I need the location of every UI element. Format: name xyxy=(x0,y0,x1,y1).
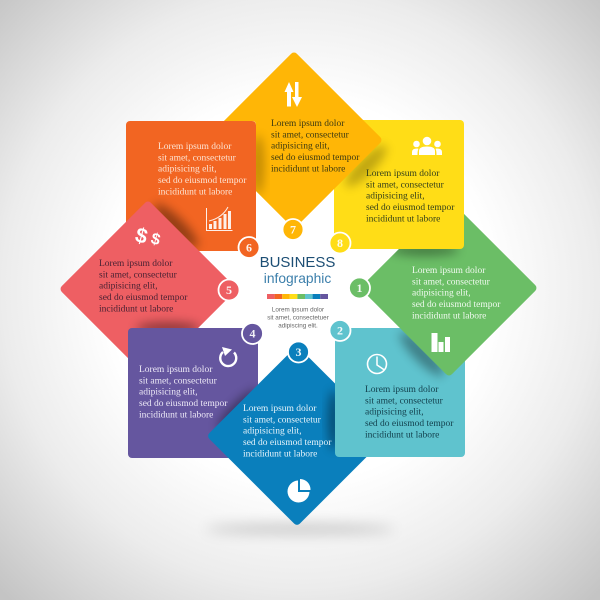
badge 6: 6 xyxy=(246,240,252,254)
title: BUSINESS xyxy=(260,254,335,271)
icon: refresh arrow xyxy=(220,347,236,366)
panel 6: orange square: Lorem ipsum dolor xyxy=(158,142,232,152)
panel 5: red diamond: sed do eiusmod tempor xyxy=(99,293,188,303)
panel 3: blue diamond xyxy=(208,355,366,525)
panel 4: purple square: Lorem ipsum dolor xyxy=(139,365,213,375)
panel 5: red diamond xyxy=(60,202,227,358)
badge 4 xyxy=(242,323,263,344)
badge 5: 5 xyxy=(226,283,232,297)
badge 8 xyxy=(330,232,350,254)
panel 1: green diamond: adipisicing elit, xyxy=(412,289,471,299)
icon: dollar signs: $ xyxy=(133,224,150,249)
badge 5 xyxy=(218,280,240,300)
panel 2: teal square: incididunt ut labore xyxy=(365,430,439,440)
panel 6: orange square: sit amet, consectetur xyxy=(158,153,237,163)
badge 1: 1 xyxy=(356,281,362,295)
panel 1: green diamond: Lorem ipsum dolor xyxy=(412,266,486,276)
icon: clock xyxy=(368,354,386,374)
panel 7: amber diamond: Lorem ipsum dolor xyxy=(271,119,345,129)
panel 2: teal square xyxy=(335,327,465,457)
panel 8: yellow square: Lorem ipsum dolor xyxy=(366,169,440,179)
panel 5: red diamond: adipisicing elit, xyxy=(99,282,158,292)
panel 4: purple square xyxy=(128,328,263,458)
panel 4: purple square: adipisicing elit, xyxy=(139,388,198,398)
panel 4: purple square: sit amet, consectetur xyxy=(139,376,218,386)
panel 7: amber diamond xyxy=(224,52,382,222)
panel 7: amber diamond: sed do eiusmod tempor xyxy=(271,153,360,163)
panel 5: red diamond: sit amet, consectetur xyxy=(99,270,178,280)
badge 4: 4 xyxy=(250,326,256,340)
badge 7: 7 xyxy=(290,222,296,236)
panel 3: blue diamond: incididunt ut labore xyxy=(243,449,317,459)
panel 2: teal square: sit amet, consectetur xyxy=(365,396,444,406)
panel 4: purple square: sed do eiusmod tempor xyxy=(139,399,228,409)
panel 1: green diamond: sit amet, consectetur xyxy=(412,277,491,287)
panel 7: amber diamond: incididunt ut labore xyxy=(271,164,345,174)
centre caption: adipiscing elit. xyxy=(278,322,318,330)
centre caption: sit amet, consectetuer xyxy=(267,314,329,322)
icon: people xyxy=(412,137,442,155)
panel 7: amber diamond: adipisicing elit, xyxy=(271,142,330,152)
panel 1: green diamond xyxy=(368,214,536,376)
panel 6: orange square: sed do eiusmod tempor xyxy=(158,176,247,186)
panel 2: teal square: Lorem ipsum dolor xyxy=(365,385,439,395)
badge 6 xyxy=(238,237,260,258)
panel 3: blue diamond: sit amet, consectetur xyxy=(243,415,322,425)
icon: growth chart xyxy=(206,207,232,230)
icon: pie chart xyxy=(288,479,311,502)
badge 8: 8 xyxy=(337,236,343,250)
icon: dollar signs: $ xyxy=(149,230,162,249)
badge 1 xyxy=(349,278,370,298)
panel 4: purple square: incididunt ut labore xyxy=(139,410,213,420)
panel 6: orange square: adipisicing elit, xyxy=(158,165,217,175)
panel 8: yellow square: incididunt ut labore xyxy=(366,214,440,224)
panel 3: blue diamond: Lorem ipsum dolor xyxy=(243,404,317,414)
badge 3: 3 xyxy=(296,345,302,359)
panel 5: red diamond: Lorem ipsum dolor xyxy=(99,259,173,269)
badge 2: 2 xyxy=(337,324,343,338)
panel 7: amber diamond: sit amet, consectetur xyxy=(271,130,350,140)
panel 6: orange square xyxy=(126,121,256,253)
panel 3: blue diamond: adipisicing elit, xyxy=(243,427,302,437)
ground shadow xyxy=(205,524,395,534)
centre caption: Lorem ipsum dolor xyxy=(272,306,324,314)
panel 8: yellow square: sed do eiusmod tempor xyxy=(366,203,455,213)
badge 7 xyxy=(282,219,304,240)
panel 5: red diamond: incididunt ut labore xyxy=(99,304,173,314)
panel 2: teal square: adipisicing elit, xyxy=(365,408,424,418)
panel 6: orange square: incididunt ut labore xyxy=(158,187,232,197)
panel 8: yellow square xyxy=(334,120,464,249)
colour strip xyxy=(267,294,328,299)
icon: up and down arrows xyxy=(284,82,302,107)
panel 2: teal square: sed do eiusmod tempor xyxy=(365,419,454,429)
subtitle: infographic xyxy=(264,271,331,286)
icon: bar chart xyxy=(432,333,450,352)
badge 3 xyxy=(288,342,309,362)
icon: dollar signs xyxy=(133,224,162,249)
panel 1: green diamond: incididunt ut labore xyxy=(412,311,486,321)
panel 3: blue diamond: sed do eiusmod tempor xyxy=(243,438,332,448)
panel 8: yellow square: sit amet, consectetur xyxy=(366,180,445,190)
panel 1: green diamond: sed do eiusmod tempor xyxy=(412,300,501,310)
panel 8: yellow square: adipisicing elit, xyxy=(366,192,425,202)
badge 2 xyxy=(330,320,350,341)
